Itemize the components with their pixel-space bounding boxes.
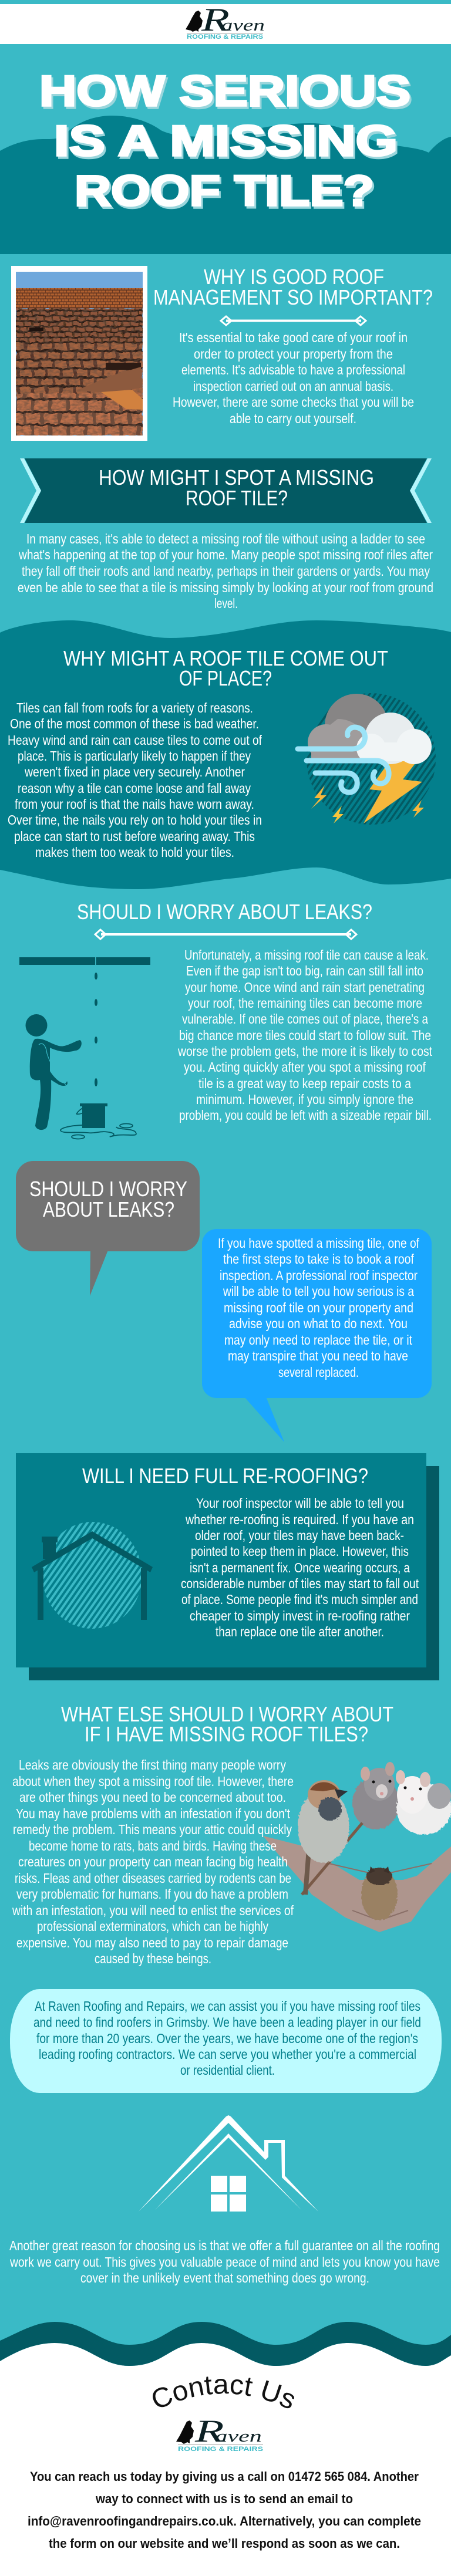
callout: blue speech bubble: several replaced. (278, 1365, 359, 1380)
body text (8, 700, 262, 860)
text block: contact details: the form on our website and we’ll respond as soon as we can. (49, 2536, 400, 2551)
text block: contact details (28, 2469, 421, 2551)
body text: able to carry out yourself. (230, 411, 356, 426)
body text (173, 330, 414, 426)
photo: damaged roof tiles (11, 266, 147, 441)
title (39, 67, 410, 215)
body text: place. This is particularly likely to happen if they (18, 748, 251, 764)
divider (221, 316, 366, 325)
banner heading: ROOF TILE? (186, 486, 288, 510)
heading: IF I HAVE MISSING ROOF TILES? (85, 1722, 368, 1746)
body text: minimum. However, if you simply ignore the (196, 1092, 413, 1107)
text block: contact details: way to connect with us is to send an email to (95, 2491, 353, 2506)
icon: person with bucket under a leak (19, 957, 150, 1139)
text block: guarantee: cover in the unlikely event that something does go wrong. (80, 2270, 369, 2285)
body text (18, 531, 433, 611)
body text: with an infestation, you will need to enlist the services of (12, 1903, 294, 1918)
callout: blue speech bubble: may only need to replace the tile, or it (224, 1332, 413, 1348)
body text: One of the most common of these is bad weather. (10, 716, 259, 731)
heading: WHAT ELSE SHOULD I WORRY ABOUT (61, 1702, 393, 1726)
heading (61, 1702, 393, 1746)
body text: whether re-roofing is required. If you have an (185, 1512, 414, 1527)
panel: why might a tile come out of place (wave band) (0, 620, 451, 889)
wave background (0, 620, 451, 889)
callout: blue speech bubble: the first steps to take is to book a roof (223, 1251, 415, 1267)
footer: white area with scalloped edge (0, 2322, 451, 2576)
body text: inspection carried out on an annual basis. (193, 379, 393, 394)
divider (95, 930, 356, 939)
body text: pointed to keep them in place. However, this (191, 1544, 409, 1559)
body text: become home to rats, bats and birds. Having these (29, 1838, 277, 1853)
heading (153, 265, 433, 309)
icon: house outline (32, 1522, 153, 1629)
body text: place can start to rust before wearing away. This (14, 829, 255, 844)
heading (63, 646, 388, 690)
heading: WILL I NEED FULL RE-ROOFING? (82, 1464, 368, 1488)
body text: older roof, your tiles may have been back- (195, 1528, 404, 1543)
body text: Tiles can fall from roofs for a variety of reasons. (16, 700, 253, 715)
panel: how might I spot a missing tile (18, 458, 433, 611)
rats (352, 1762, 451, 1835)
panel: what else should I worry about (12, 1702, 451, 1966)
bat (263, 1836, 451, 1932)
panel: should I worry about leaks (19, 900, 433, 1139)
callout: blue speech bubble: inspection. A professional roof inspector (220, 1268, 418, 1283)
logo: Raven Roofing & Repairs (footer): Raven (194, 2413, 262, 2449)
body text: than replace one tile after another. (216, 1624, 384, 1639)
icon: white house roof (139, 2115, 318, 2212)
ribbon banner (20, 458, 432, 523)
body text: risks. Fleas and other diseases carried by rodents can be (15, 1871, 291, 1886)
header: white logo band (0, 4, 451, 44)
callout: grey speech bubble (16, 1161, 200, 1296)
body text: caused by these beings. (95, 1951, 211, 1966)
body text (177, 947, 433, 1123)
icon: storm cloud, wind and lightning (298, 693, 436, 825)
callout: grey speech bubble: SHOULD I WORRY (29, 1177, 187, 1201)
callout: blue speech bubble: will be able to tell you how serious is a (223, 1284, 414, 1299)
logo: Raven Roofing & Repairs (footer) (176, 2413, 263, 2453)
callout: blue speech bubble (202, 1229, 432, 1442)
banner heading: HOW MIGHT I SPOT A MISSING (99, 465, 374, 489)
callout: blue speech bubble: missing roof tile on your property and (224, 1300, 413, 1315)
heading: OF PLACE? (179, 666, 272, 690)
body text (12, 1757, 294, 1966)
panel: about Raven Roofing (light callout) (10, 1989, 442, 2093)
logo: Raven Roofing & Repairs: ROOFING & REPAIRS (187, 33, 263, 40)
body text: You may have problems with an infestation if you don't (16, 1806, 291, 1821)
heading: WHY MIGHT A ROOF TILE COME OUT (63, 646, 388, 670)
illustration: bat, sparrow and rats (263, 1762, 451, 1932)
body text: order to protect your property from the (194, 346, 393, 362)
body text: Leaks are obviously the first thing many people worry (19, 1757, 286, 1773)
banner heading (99, 465, 374, 510)
title: HOW SERIOUS (39, 67, 410, 115)
body text: cheaper to simply invest in re-roofing rather (190, 1608, 410, 1623)
sparrow (298, 1780, 362, 1895)
body text: about when they spot a missing roof tile. However, there (12, 1774, 294, 1789)
heading: Contact Us (curved): Contact Us (153, 2376, 294, 2409)
body text: Your roof inspector will be able to tell you (196, 1495, 404, 1511)
body text: level. (214, 596, 238, 611)
heading: WHY IS GOOD ROOF (204, 265, 384, 289)
body text: It's essential to take good care of your roof in (179, 330, 408, 345)
body text: weren't fixed in place very securely. Another (24, 764, 245, 779)
title: ROOF TILE? (75, 167, 374, 215)
logo: Raven Roofing & Repairs: Raven (201, 1, 265, 38)
body text: are other things you need to be concerned about too. (19, 1790, 286, 1805)
body text: creatures on your property can mean facing big health (18, 1854, 288, 1869)
body text: makes them too weak to hold your tiles. (35, 845, 234, 860)
text block: contact details: You can reach us today by giving us a call on 01472 565 084. Another (30, 2469, 419, 2484)
card (16, 1453, 426, 1667)
body text: reason why a tile can come loose and fall away (18, 781, 251, 796)
heading: Contact Us (curved) (153, 2376, 294, 2409)
callout: blue speech bubble: may transpire that you need to have (228, 1348, 408, 1363)
panel: good roof management (11, 265, 433, 441)
body text: very problematic for humans. If you do have a problem (16, 1886, 288, 1902)
body text: Heavy wind and rain can cause tiles to come out of (8, 732, 262, 748)
heading: SHOULD I WORRY ABOUT LEAKS? (77, 900, 372, 924)
panel: will I need full re-roofing (16, 1453, 439, 1680)
body text (181, 1495, 419, 1639)
callout: blue speech bubble: advise you on what to do next. You (229, 1316, 408, 1331)
text block: contact details: info@ravenroofingandrepairs.co.uk. Alternatively, you can complete (28, 2514, 421, 2528)
body text: from your roof is that the nails have worn away. (15, 796, 254, 812)
logo: Raven Roofing & Repairs (footer): ROOFING & REPAIRS (178, 2446, 263, 2453)
card shadow (29, 1466, 439, 1680)
body text: expensive. You may also need to pay to repair damage (16, 1935, 288, 1950)
title: IS A MISSING (54, 117, 398, 165)
panel: about Raven Roofing (light callout): or residential client. (180, 2062, 275, 2078)
body text: tile is a great way to keep repair costs to a (198, 1076, 411, 1091)
body text: Over time, the nails you rely on to hold your tiles in (8, 812, 262, 828)
body text: elements. It's advisable to have a professional (181, 362, 405, 377)
text block: guarantee (9, 2238, 440, 2285)
hero hills background (0, 116, 451, 254)
body text: remedy the problem. This means your attic could quickly (13, 1822, 292, 1837)
callout: grey speech bubble: ABOUT LEAKS? (43, 1197, 174, 1221)
body text: professional exterminators, which can be highly (37, 1919, 268, 1934)
